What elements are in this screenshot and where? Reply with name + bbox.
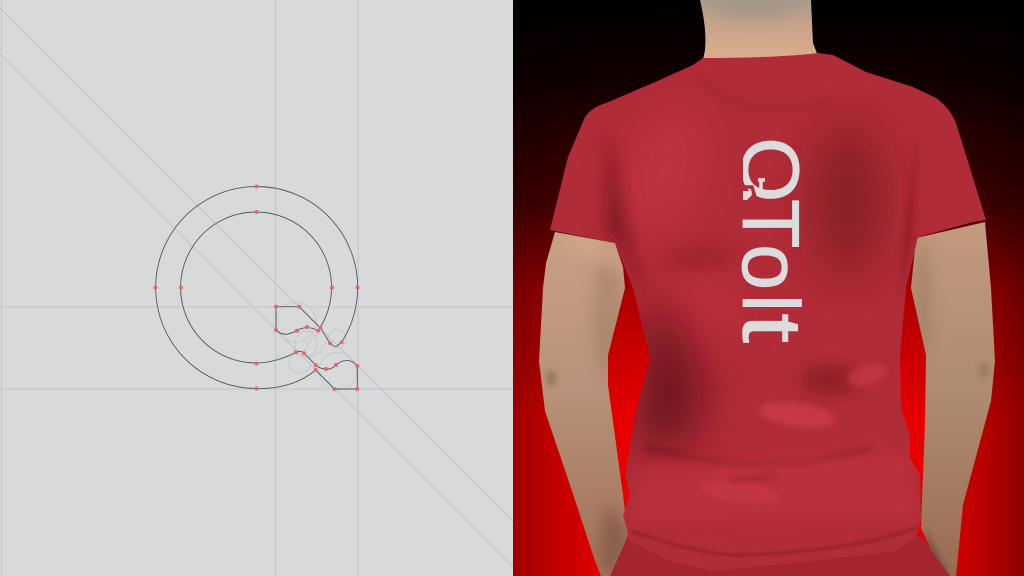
panel: logo construction grid — [0, 0, 513, 576]
logo outline: upper Q stroke and tail — [181, 212, 342, 363]
t-shirt — [550, 53, 986, 571]
shorts — [610, 536, 950, 576]
shirt print: QTolt wordmark: l — [725, 294, 815, 312]
construction guide lines — [0, 0, 513, 576]
shirt print: QTolt wordmark: o — [725, 244, 818, 290]
neck — [700, 0, 818, 60]
construction helper circles — [276, 302, 357, 390]
shirt print: QTolt wordmark: T — [725, 199, 815, 248]
panel: t-shirt mockup photo — [513, 0, 1024, 576]
Q inner hook — [758, 180, 765, 191]
left arm — [539, 225, 630, 576]
shirt folds and shading — [603, 77, 920, 555]
shirt print: QTolt wordmark: Q — [725, 137, 817, 203]
shirt print: QTolt wordmark: t — [725, 313, 819, 343]
Q notch gap — [741, 187, 755, 197]
shirt print: QTolt wordmark — [742, 140, 802, 343]
right arm — [911, 222, 995, 576]
Q tail fragment — [743, 191, 752, 200]
red glow background — [513, 0, 1024, 576]
logo outline: outer Q ring and lower tail — [156, 187, 358, 389]
anchor points — [154, 184, 360, 391]
